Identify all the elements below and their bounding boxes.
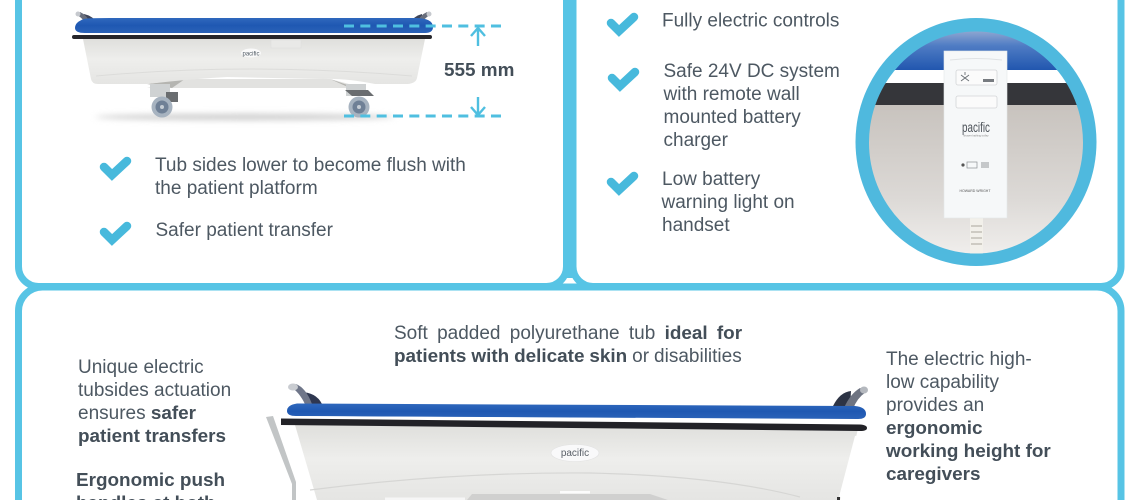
photo: trolley in lowered position — [72, 12, 433, 120]
panel: features — [18, 268, 1121, 500]
photo: handset in circle: pacific — [962, 119, 990, 135]
text: high-low capability: caregivers — [886, 464, 981, 485]
photo: trolley at working height — [266, 384, 868, 500]
height dimension: 555 mm — [344, 26, 514, 116]
icon: check low battery — [611, 176, 634, 190]
text: high-low capability: working height for — [885, 441, 1051, 462]
text: push handles: Ergonomic push — [76, 470, 225, 491]
text: delicate skin: patients with delicate skin or disabilities — [394, 346, 742, 367]
text: padded tub: Soft padded polyurethane tub ideal for — [394, 323, 743, 344]
text: low battery: Low battery — [662, 169, 760, 190]
text: low battery: warning light on — [660, 192, 795, 213]
text: high-low capability: The electric high- — [886, 349, 1032, 370]
text: tubsides actuation: patient transfers — [78, 426, 226, 447]
text: high-low capability: low capability — [886, 372, 999, 393]
text: tubsides actuation: tubsides actuation — [78, 380, 231, 401]
panel: lowered height — [18, 0, 566, 286]
text: 24V system: mounted battery — [664, 107, 801, 128]
text: fully electric: Fully electric controls — [662, 10, 839, 32]
text: low battery: handset — [662, 215, 730, 236]
text: high-low capability: provides an — [886, 395, 984, 416]
text: safer transfer: Safer patient transfer — [156, 220, 334, 241]
icon: check tub sides — [104, 161, 127, 175]
photo: trolley at working height: pacific — [561, 448, 589, 459]
icon: check safer transfer — [104, 226, 127, 240]
photo: handset in circle: HOWARD WRIGHT — [960, 189, 991, 193]
photo: handset in circle: shower bathing trolley — [963, 134, 989, 138]
text: tub sides: Tub sides lower to become flush with — [155, 155, 466, 176]
text: tub sides: the patient platform — [155, 178, 318, 199]
height dimension: 555 mm: 555 mm — [444, 60, 514, 81]
photo: trolley in lowered position: pacific — [242, 52, 260, 58]
text: tubsides actuation: safer — [151, 403, 197, 424]
icon: check 24V — [612, 72, 635, 86]
text: tubsides actuation: Unique electric — [78, 357, 204, 378]
text: 24V system: charger — [664, 130, 729, 151]
icon: check fully electric — [611, 17, 634, 31]
text: 24V system: with remote wall — [662, 84, 800, 105]
text: 24V system: Safe 24V DC system — [664, 61, 840, 82]
text: tubsides actuation: ensures — [78, 403, 151, 424]
text: high-low capability: ergonomic — [886, 418, 983, 439]
panel: electric controls — [573, 0, 1121, 286]
photo: handset in circle — [856, 18, 1096, 266]
